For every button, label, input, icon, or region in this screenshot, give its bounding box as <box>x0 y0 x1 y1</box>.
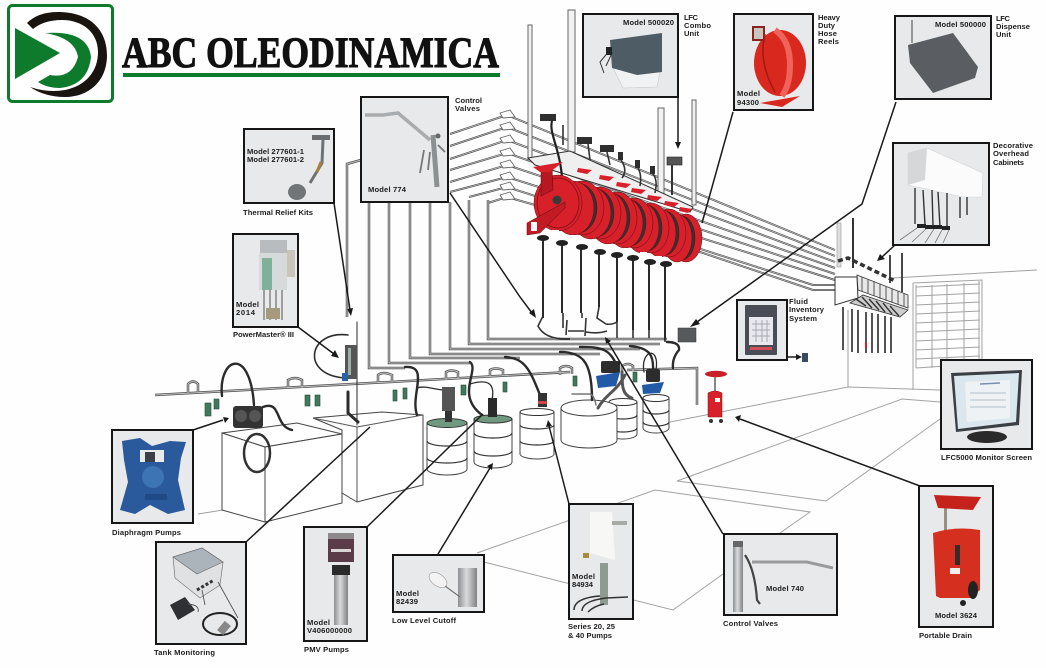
diaphragm pump on tank <box>233 406 263 428</box>
label: series pumps: & 40 Pumps <box>568 631 612 640</box>
label: fluid inventory system: System <box>789 314 817 323</box>
panel: thermal relief kits: Model 277601-2 <box>247 155 304 164</box>
LFC combo unit on pipe <box>667 157 682 195</box>
label: PMV pumps: PMV Pumps <box>304 645 349 654</box>
panel: heavy duty hose reel <box>734 14 813 110</box>
leader lines and arrows <box>193 97 920 554</box>
label: portable drain: Portable Drain <box>919 631 972 640</box>
title: ABC OLEODINAMICA <box>122 30 499 77</box>
label: diaphragm pumps: Diaphragm Pumps <box>112 528 181 537</box>
drum pump two <box>488 398 497 417</box>
hose coil <box>244 434 270 472</box>
hose drops from reels <box>538 240 665 342</box>
panel: PMV pumps: V406000000 <box>307 626 352 635</box>
panel: LFC combo unit: Model 500020 <box>623 18 674 27</box>
bank of red hose reels <box>527 162 702 267</box>
panel: tank monitoring <box>156 542 246 644</box>
panel: LFC dispense unit <box>895 16 991 99</box>
PowerMaster pump <box>342 345 357 381</box>
label: hose reels: Hose <box>818 29 837 38</box>
panel: thermal relief kits <box>244 129 334 203</box>
label: LFC5000 monitor screen: LFC5000 Monitor Screen <box>941 453 1032 462</box>
label: tank monitoring: Tank Monitoring <box>154 648 215 657</box>
panel: diaphragm pumps <box>112 430 193 523</box>
logo <box>8 6 112 102</box>
label: LFC combo unit: Unit <box>684 29 699 38</box>
label: hose reels: Heavy <box>818 13 841 22</box>
label: LFC combo unit: Combo <box>684 21 711 30</box>
oil storage tanks <box>222 412 423 522</box>
drums <box>427 394 669 475</box>
control unit box near pipes <box>678 328 696 342</box>
label: control valves top: Control <box>455 96 482 105</box>
label: decorative cabinets: Cabinets <box>993 158 1024 167</box>
label: decorative cabinets: Decorative <box>993 141 1033 150</box>
panel: decorative overhead cabinets <box>893 143 989 245</box>
title underline <box>123 73 500 77</box>
panel: LFC combo unit <box>583 14 678 97</box>
label: hose reels: Reels <box>818 37 839 46</box>
panel: LFC5000 monitor <box>941 360 1032 449</box>
drum pump one <box>442 387 455 422</box>
panel: PMV pumps: Model <box>307 618 330 627</box>
panel: series pumps <box>569 504 633 619</box>
panel: Model 740 control valve: Model 740 <box>766 584 804 593</box>
overhead beam <box>528 151 693 212</box>
label: thermal relief kits: Thermal Relief Kits <box>243 208 313 217</box>
panel: series pumps: 84934 <box>572 580 594 589</box>
label: PowerMaster: PowerMaster® III <box>233 330 294 339</box>
small red portable drain <box>705 371 727 423</box>
pumps <box>233 345 664 472</box>
panel: portable drain: Model 3624 <box>935 611 978 620</box>
panel: low level cutoff: 82439 <box>396 597 418 606</box>
panel: Model 740 control valve <box>724 534 837 615</box>
drum pump three <box>538 393 547 407</box>
hoses to pumps <box>222 322 679 430</box>
label: LFC dispense unit: LFC <box>996 14 1011 23</box>
vertical pipes and air line <box>155 160 697 405</box>
panel: LFC dispense unit: Model 500000 <box>935 20 986 29</box>
panel: heavy duty hose reel: Model <box>737 89 760 98</box>
label: LFC combo unit: LFC <box>684 13 699 22</box>
panel: portable drain <box>919 486 993 627</box>
label: fluid inventory system: Inventory <box>789 305 825 314</box>
panel: Model 774 control valve <box>361 97 448 202</box>
label: series pumps: Series 20, 25 <box>568 622 616 631</box>
air filters <box>205 372 637 416</box>
label: low level cutoff: Low Level Cutoff <box>392 616 456 625</box>
panel: series pumps: Model <box>572 572 595 581</box>
overhead pipe runs <box>450 110 835 290</box>
blue pump two <box>642 369 664 394</box>
ceiling support posts <box>528 10 696 205</box>
panel: heavy duty hose reel: 94300 <box>737 98 759 107</box>
panel: low level cutoff <box>393 555 484 612</box>
label: LFC dispense unit: Unit <box>996 30 1011 39</box>
panel: PMV pumps <box>304 527 367 641</box>
label: fluid inventory system: Fluid <box>789 297 808 306</box>
overhead cabinet with hoses <box>835 218 908 353</box>
label: decorative cabinets: Overhead <box>993 149 1029 158</box>
label: control valves top: Valves <box>455 104 480 113</box>
blue pump one <box>596 361 620 388</box>
panel: PowerMaster pump: 2014 <box>236 308 256 317</box>
label: control valves bottom: Control Valves <box>723 619 778 628</box>
panel: Model 774 control valve: Model 774 <box>368 185 407 194</box>
panel: PowerMaster pump <box>233 234 298 327</box>
panel: low level cutoff: Model <box>396 589 419 598</box>
label: hose reels: Duty <box>818 21 836 30</box>
solenoid valves above beam <box>540 114 682 197</box>
label: LFC dispense unit: Dispense <box>996 22 1030 31</box>
panel: fluid inventory system <box>737 300 787 360</box>
panel: PowerMaster pump: Model <box>236 300 259 309</box>
warehouse floor and wall lines <box>198 270 1037 610</box>
panel: thermal relief kits: Model 277601-1 <box>247 147 305 156</box>
